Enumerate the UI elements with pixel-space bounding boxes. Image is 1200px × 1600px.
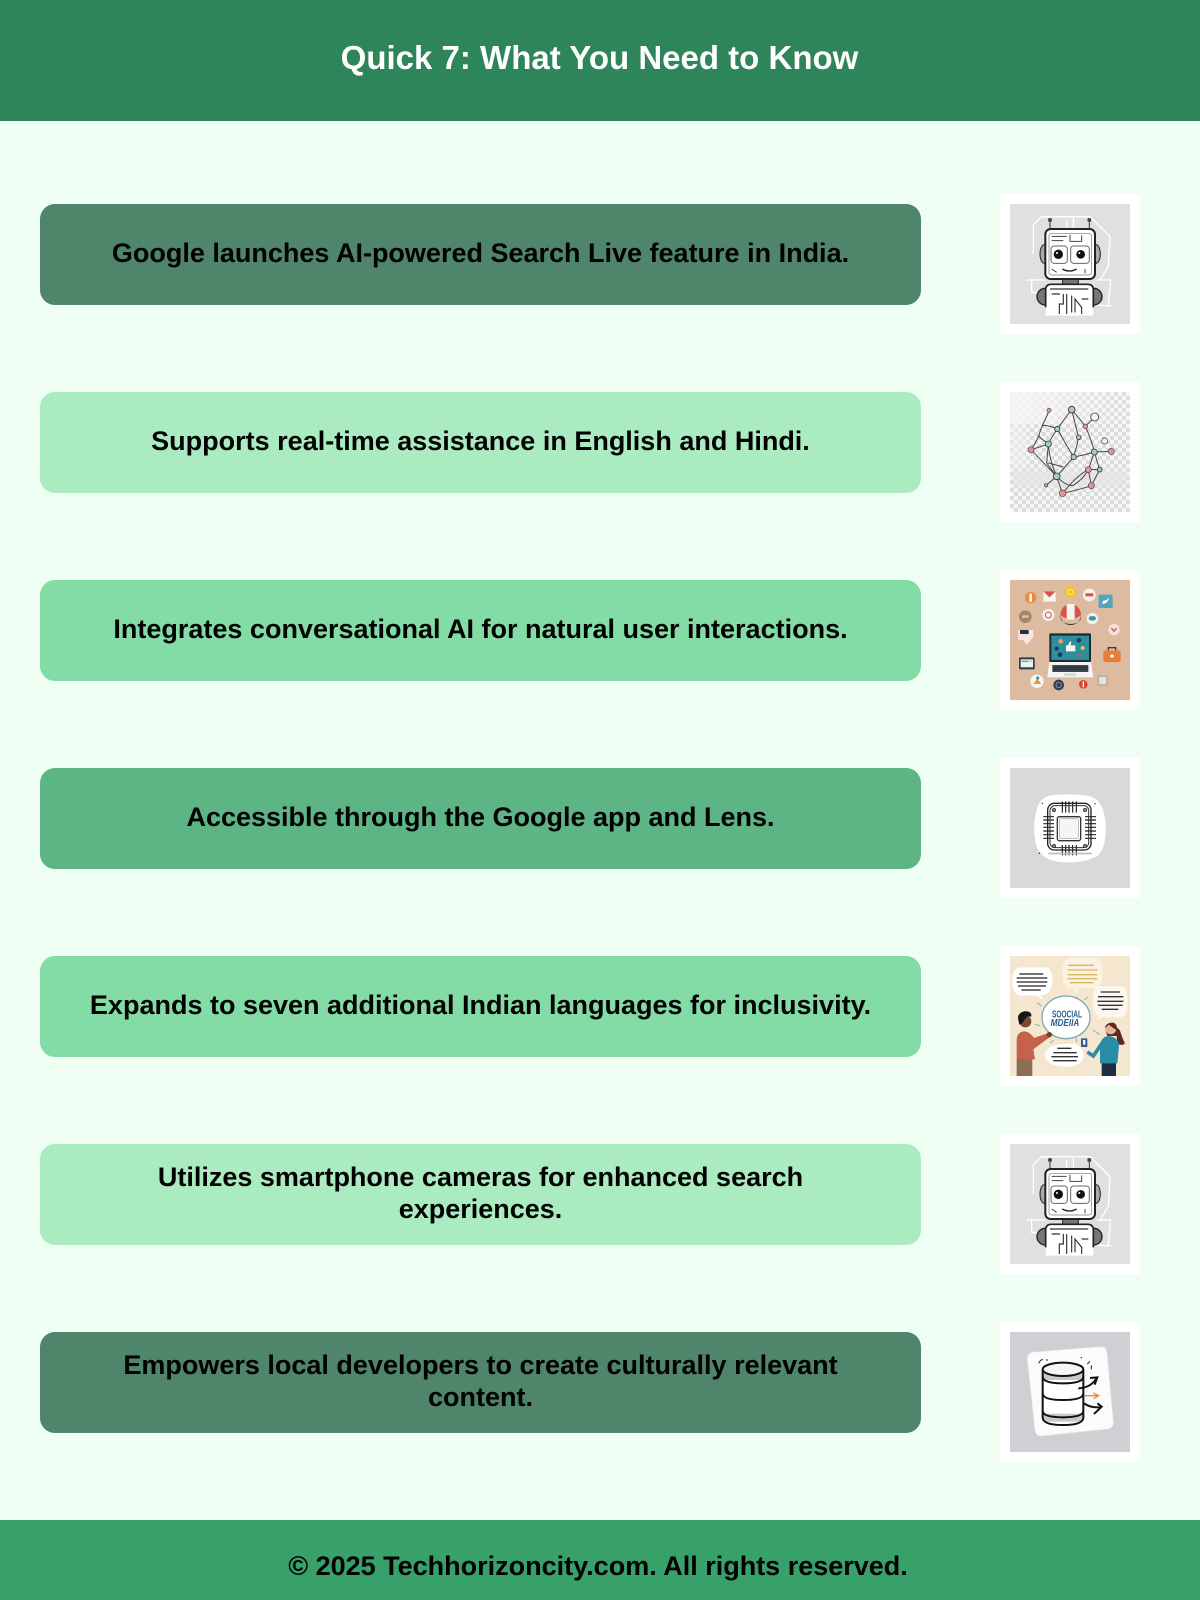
bar: local developers <box>40 1332 921 1433</box>
icon: social media conversation <box>1000 946 1140 1086</box>
bar: Google app and Lens <box>40 768 921 869</box>
bar: smartphone cameras <box>40 1144 921 1245</box>
item 3 <box>40 570 1140 710</box>
item 5 <box>40 946 1140 1086</box>
copyright text: © 2025 Techhorizoncity.com. All rights reserved. <box>288 1551 908 1581</box>
icon: network graph <box>1000 382 1140 522</box>
header band <box>0 0 1200 121</box>
bar: real-time assistance: Supports real-time assistance in English and Hindi. <box>151 426 810 456</box>
icon: microchip <box>1000 758 1140 898</box>
item 2 <box>40 382 1140 522</box>
title: Quick 7: What You Need to Know <box>341 39 858 76</box>
item 6 <box>40 1134 1140 1274</box>
bar: seven more languages: Expands to seven additional Indian languages for inclusivity. <box>90 990 871 1020</box>
bar: conversational AI: Integrates conversational AI for natural user interactions. <box>113 614 848 644</box>
icon: social media conversation: SOOCIAL <box>1052 1009 1082 1020</box>
icon: social media conversation: MDEIIA <box>1051 1018 1079 1029</box>
item 1 <box>40 194 1140 334</box>
icon: database with arrows <box>1000 1322 1140 1462</box>
bar: conversational AI <box>40 580 921 681</box>
bar: smartphone cameras: Utilizes smartphone cameras for enhanced search experiences. <box>158 1162 803 1224</box>
item 4 <box>40 758 1140 898</box>
bar: seven more languages <box>40 956 921 1057</box>
bar: real-time assistance <box>40 392 921 493</box>
icon: robot <box>1000 1134 1140 1274</box>
bar: Google app and Lens: Accessible through the Google app and Lens. <box>186 802 775 832</box>
footer band <box>0 1520 1200 1600</box>
icon: robot <box>1000 194 1140 334</box>
bar: local developers: Empowers local developers to create culturally relevant content. <box>123 1350 838 1412</box>
bar: Search Live launch: Google launches AI-powered Search Live feature in India. <box>112 238 849 268</box>
bar: Search Live launch <box>40 204 921 305</box>
item 7 <box>40 1322 1140 1462</box>
icon: laptop with social icons <box>1000 570 1140 710</box>
